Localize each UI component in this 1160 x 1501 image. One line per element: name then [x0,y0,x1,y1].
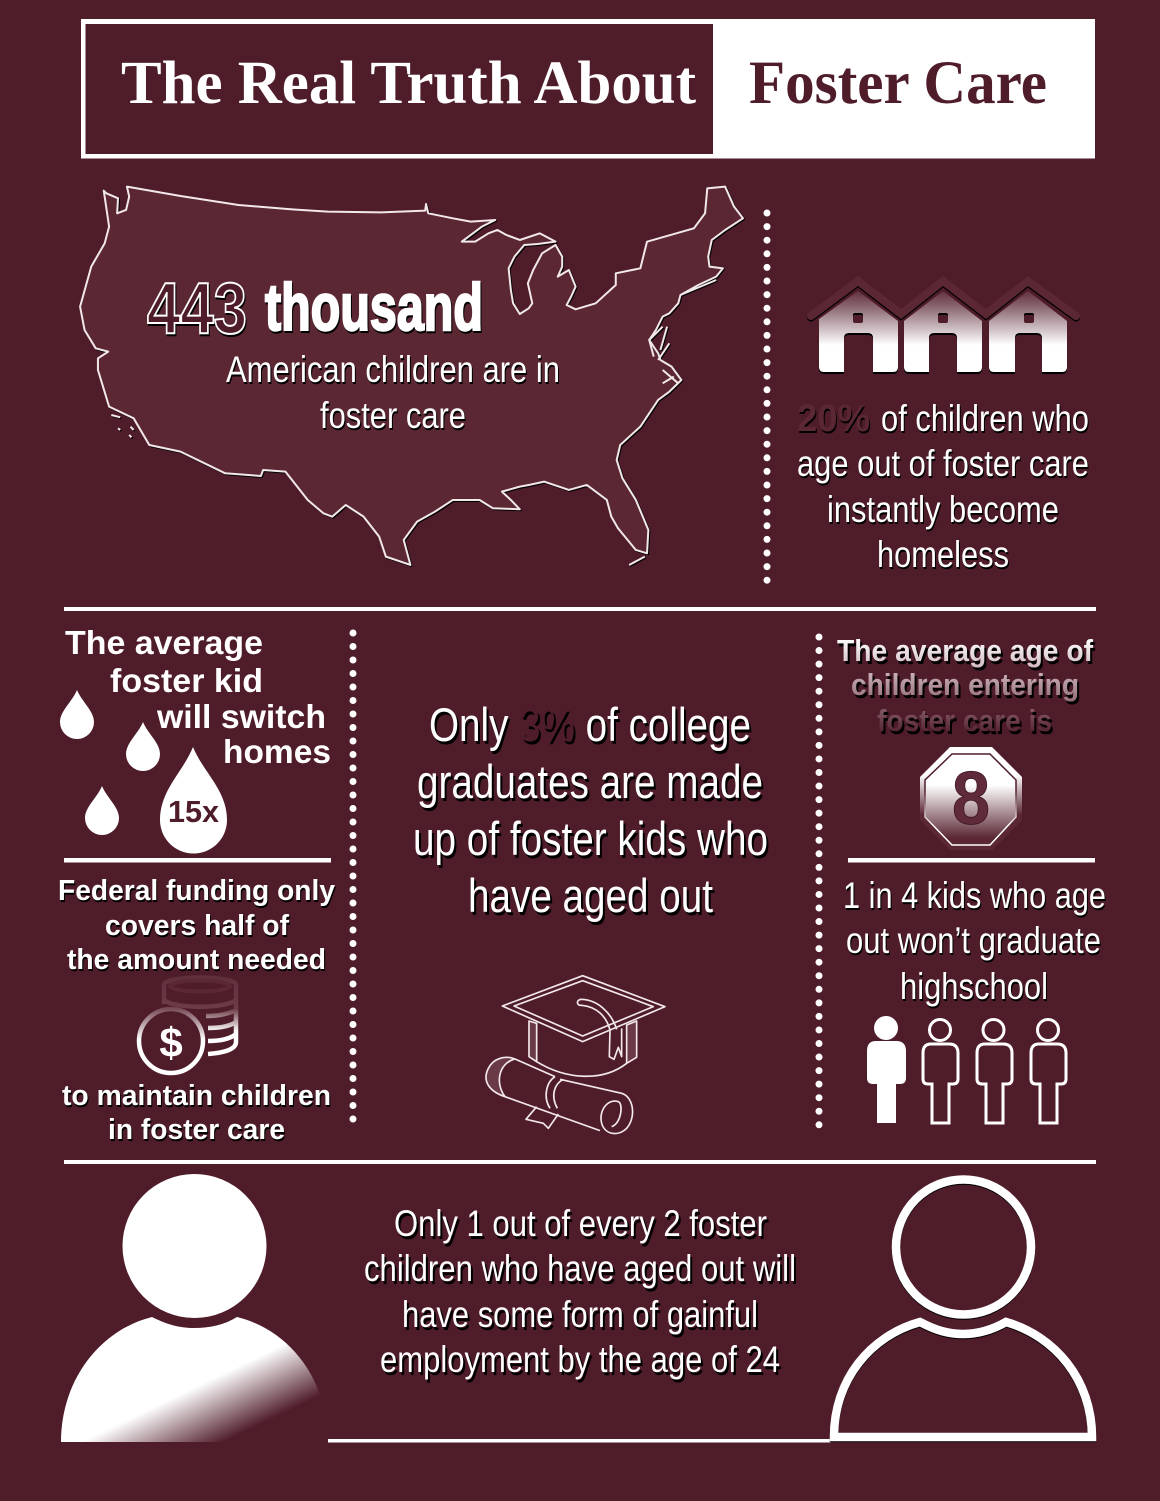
icon: drop 2 [126,722,160,771]
text: 20% homeless stat: 20% [797,398,870,440]
title: The Real Truth About: The Real Truth About [121,50,697,117]
divider: right column [848,858,1095,862]
text: college graduates: up of foster kids who [413,812,768,865]
text: college graduates [413,698,768,922]
text: average age: children entering [851,667,1079,702]
heading: average foster kid: will switch [156,698,326,735]
text: 20% homeless stat: of children who [881,398,1089,439]
baseline rule [328,1439,831,1442]
map caption: foster care [320,395,466,436]
text: high school stat [843,875,1106,1007]
icon: dollar coin: $ [159,1019,183,1066]
text: employment stat: employment by the age of 24 [380,1339,780,1380]
title: Foster Care: Foster Care [749,50,1047,117]
icon: drop 1 [60,690,94,739]
map caption: American children are in [226,349,560,390]
text: high school stat: 1 in 4 kids who age [843,875,1106,916]
text: maintain children: in foster care [108,1114,285,1146]
person: outline 1 [923,1020,958,1123]
stat: 443: 443 [147,269,247,349]
text: 20% homeless stat [797,398,1089,575]
person: filled [867,1016,906,1123]
icon: filled person [61,1174,328,1442]
text: employment stat [364,1203,796,1380]
US map panel [80,187,743,565]
heading: average foster kid: homes [223,733,331,770]
icon: three houses [811,281,1076,372]
text: employment stat: have some form of gainful [402,1294,758,1335]
icon: big drop [160,747,227,854]
text: maintain children [62,1080,331,1146]
text: high school stat: highschool [900,966,1048,1007]
text: employment stat: children who have aged out will [364,1248,796,1289]
text: federal funding: the amount needed [67,944,326,976]
text: 20% homeless stat: instantly become [827,489,1059,530]
icon: graduation cap and diploma [486,976,665,1134]
heading: average foster kid [65,624,331,770]
icon: four people [867,1016,1066,1123]
map of the United States [80,187,743,565]
icon: octagon badge with 8 [920,747,1022,850]
section divider: upper [64,607,1096,611]
text: average age [837,633,1094,738]
title banner [81,19,1095,158]
text: college graduates: Only 3% of college [429,698,751,751]
text: employment stat: Only 1 out of every 2 foster [394,1203,767,1244]
stat: thousand: thousand [265,270,483,344]
text: average age: foster care is [877,703,1052,738]
text: federal funding: covers half of [105,910,289,942]
heading: average foster kid: The average [65,624,263,661]
panel: homes switched [60,624,331,854]
person: outline 3 [1031,1020,1066,1123]
heading: average foster kid: foster kid [110,662,263,699]
dotted divider: top [764,213,770,582]
text: federal funding [58,875,335,976]
panel: federal funding [58,875,335,1146]
text: average age: The average age of [837,633,1094,668]
dotted divider: right [816,637,822,1125]
icon: octagon badge with 8: 8 [952,756,990,840]
text: federal funding: Federal funding only [58,875,335,907]
icon: drop 3 [85,786,119,835]
divider: left column [64,858,331,862]
icon: outlined person [834,1180,1092,1437]
text: 20% homeless stat: age out of foster care [797,443,1089,484]
dotted divider: left [350,633,356,1121]
person: outline 2 [977,1020,1012,1123]
text: high school stat: out won’t graduate [846,920,1101,961]
panel: average age [837,633,1094,850]
section divider: lower [64,1160,1096,1164]
text: 20% homeless stat: homeless [877,534,1009,575]
map caption [226,349,560,436]
text: college graduates: graduates are made [417,755,763,808]
text: maintain children: to maintain children [62,1080,331,1112]
icon: coin stack [139,978,236,1073]
text: college graduates: have aged out [468,869,713,922]
label: 15x: 15x [168,794,220,829]
